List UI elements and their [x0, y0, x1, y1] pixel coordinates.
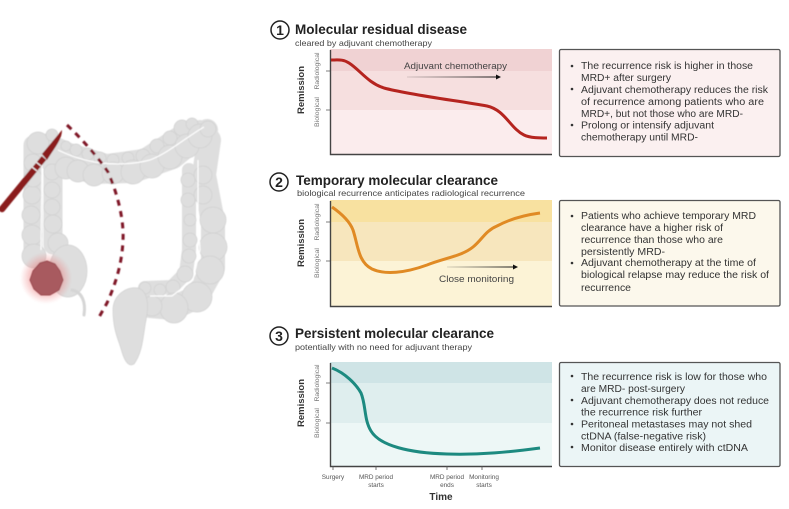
- text box 1: [560, 50, 780, 156]
- scalpel: [2, 130, 62, 209]
- heading 2: Temporary molecular clearance: [296, 172, 498, 188]
- colon body: [22, 118, 227, 365]
- time axis labels: ends: [440, 482, 454, 489]
- subheading 3: potentially with no need for adjuvant therapy: [295, 343, 473, 352]
- text box 3: The recurrence risk is low for those who: [581, 372, 767, 383]
- remission axis labels: Biological: [314, 96, 321, 127]
- text box 2: recurrence: [581, 283, 631, 294]
- remission axis labels: Remission: [296, 379, 307, 427]
- time axis labels: starts: [368, 482, 384, 489]
- time axis labels: Time: [429, 492, 453, 503]
- text box 3: Peritoneal metastases may not shed: [581, 420, 752, 430]
- heading 3: Persistent molecular clearance: [295, 325, 494, 341]
- text box 1: Adjuvant chemotherapy reduces the risk: [581, 85, 769, 96]
- time axis labels: Surgery: [322, 474, 345, 481]
- text box 1: Prolong or intensify adjuvant: [581, 120, 714, 132]
- number badge 3: [270, 327, 288, 345]
- illustration: colon with tumour and resection: [2, 118, 227, 365]
- remission axis labels: Remission: [296, 66, 307, 114]
- number badge 1: [271, 21, 289, 39]
- remission axis labels: Biological: [314, 247, 321, 278]
- text box 2: recurrence than those who are: [581, 235, 723, 246]
- label and arrow: Close monitoring: [439, 274, 514, 284]
- chart 2: [296, 200, 552, 306]
- heading 1: Molecular residual disease: [295, 21, 467, 37]
- time axis labels: MRD period: [359, 474, 393, 481]
- label and arrow: [404, 61, 508, 80]
- number badge 3: 3: [275, 328, 283, 344]
- remission axis labels: [296, 52, 321, 127]
- text box 3: Monitor disease entirely with ctDNA: [581, 443, 748, 454]
- curve: [332, 368, 540, 454]
- remission axis labels: Biological: [314, 407, 321, 438]
- remission axis labels: Radiological: [314, 203, 321, 241]
- remission axis labels: [296, 364, 321, 438]
- text box 3: ctDNA (false-negative risk): [581, 432, 706, 442]
- resection line: [67, 125, 123, 319]
- label and arrow: [439, 264, 518, 284]
- text box 3: Adjuvant chemotherapy does not reduce: [581, 396, 769, 407]
- text box 2: Patients who achieve temporary MRD: [581, 211, 756, 222]
- text box 3: the recurrence risk further: [581, 408, 703, 418]
- text box 2: [560, 200, 780, 306]
- subheading 2: biological recurrence anticipates radiological recurrence: [297, 189, 525, 198]
- remission axis labels: Remission: [296, 219, 307, 267]
- subheading 1: cleared by adjuvant chemotherapy: [295, 39, 433, 48]
- time axis labels: Monitoring: [469, 474, 499, 481]
- section 1: molecular residual disease: [271, 21, 780, 156]
- text box 3: are MRD- post-surgery: [581, 384, 685, 395]
- text box 1: MRD+ after surgery: [581, 73, 671, 84]
- text box 1: chemotherapy until MRD-: [581, 132, 698, 144]
- appendix: [72, 290, 84, 315]
- curve: [331, 60, 547, 138]
- number badge 2: [270, 173, 288, 191]
- white separation lines: [41, 127, 204, 296]
- text box 2: persistently MRD-: [581, 247, 665, 258]
- text box 1: MRD+, but not those who are MRD-: [581, 109, 743, 120]
- number badge 1: 1: [276, 22, 284, 38]
- section 2: temporary molecular clearance: [270, 172, 780, 306]
- time axis labels: MRD period: [430, 474, 464, 481]
- text box 3: [560, 362, 780, 466]
- number badge 2: 2: [275, 174, 283, 190]
- chart 1: [296, 49, 552, 154]
- section 3: persistent molecular clearance: [270, 325, 780, 503]
- chart 3: [296, 362, 552, 503]
- text box 2: biological relapse may reduce the risk of: [581, 270, 769, 281]
- label and arrow: Adjuvant chemotherapy: [404, 61, 508, 71]
- remission axis labels: Radiological: [314, 364, 321, 402]
- time axis labels: starts: [476, 482, 492, 489]
- tumour: [20, 252, 72, 304]
- remission axis labels: Radiological: [314, 52, 321, 90]
- text box 2: clearance have a higher risk of: [581, 223, 723, 234]
- text box 1: of recurrence among patients who are: [581, 97, 764, 108]
- remission axis labels: [296, 203, 321, 278]
- text box 1: The recurrence risk is higher in those: [581, 61, 753, 72]
- text box 2: Adjuvant chemotherapy at the time of: [581, 258, 756, 269]
- time axis labels: [322, 474, 499, 503]
- curve: [332, 207, 540, 272]
